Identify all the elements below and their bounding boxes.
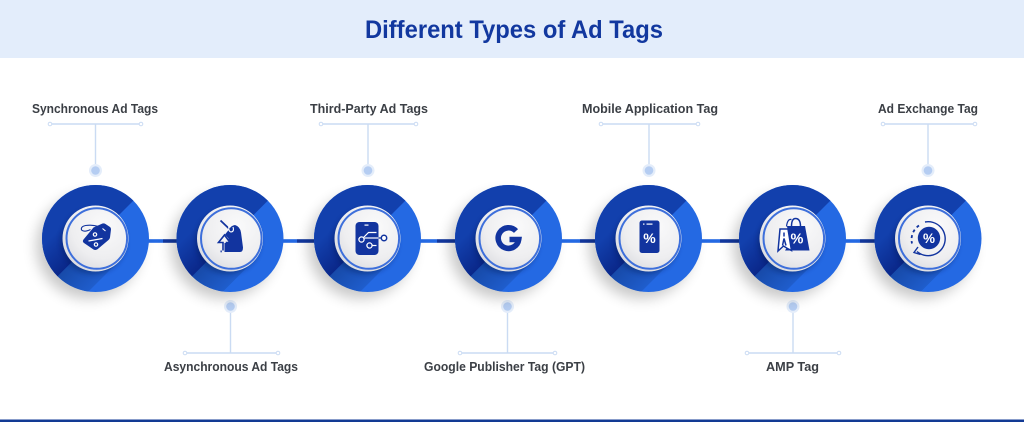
header band (0, 0, 1024, 58)
circle 6 with shopping bag percent icon (710, 178, 852, 322)
callout: Ad Exchange Tag: Ad Exchange Tag (878, 101, 978, 116)
circle 6 with shopping bag percent icon: % (791, 232, 804, 248)
callout: Synchronous Ad Tags: Synchronous Ad Tags (32, 101, 158, 116)
connector lines between circles (145, 239, 877, 243)
circle 5 with mobile percent icon (566, 178, 708, 322)
callout: Asynchronous Ad Tags: Asynchronous Ad Tags (164, 359, 298, 374)
circle 7 with exchange percent icon (845, 178, 988, 322)
circle 1 with tag icon (12, 178, 156, 322)
circle 4 with Google G icon (426, 178, 568, 322)
callout: Mobile Application Tag: Mobile Application Tag (582, 101, 718, 116)
callout: AMP Tag: AMP Tag (766, 359, 819, 374)
callout: AMP Tag (745, 300, 841, 374)
callout: Ad Exchange Tag (878, 101, 978, 177)
circle 2 with upload tag icon (147, 178, 290, 322)
callout: Synchronous Ad Tags (32, 101, 158, 177)
callout: Google Publisher Tag (GPT): Google Publisher Tag (GPT) (424, 359, 585, 374)
callout: Third-Party Ad Tags: Third-Party Ad Tags (310, 101, 428, 116)
circle 5 with mobile percent icon: % (643, 230, 656, 246)
bottom rule (0, 420, 1024, 422)
circle 7 with exchange percent icon: % (923, 231, 935, 246)
callout: Asynchronous Ad Tags (164, 300, 298, 374)
callout: Third-Party Ad Tags (310, 101, 428, 177)
callout: Google Publisher Tag (GPT) (424, 300, 585, 374)
title: Different Types of Ad Tags (365, 16, 663, 44)
circle 3 with phone circuit icon (284, 178, 428, 322)
callout: Mobile Application Tag (582, 101, 718, 177)
